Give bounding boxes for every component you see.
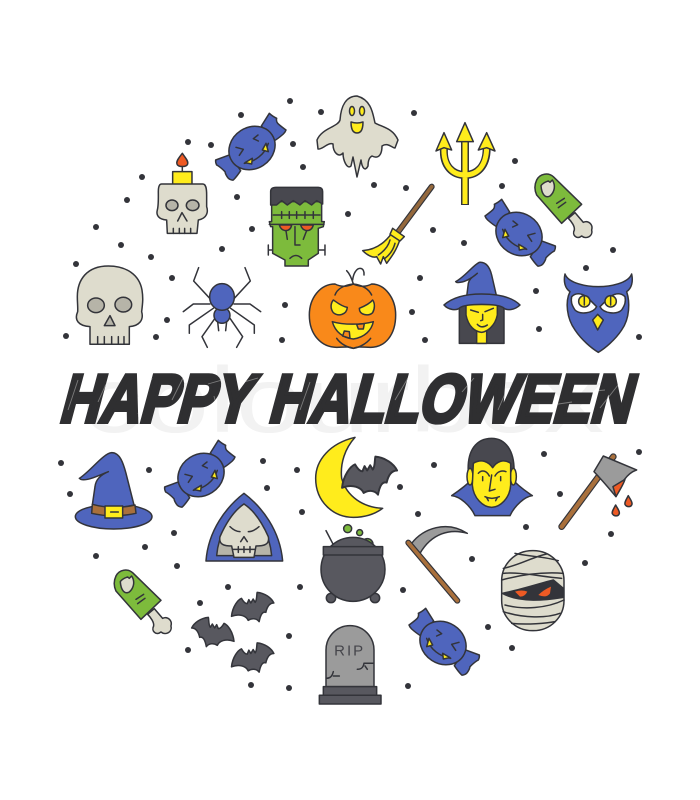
icon: hooded reaper bbox=[206, 493, 283, 561]
icon: tombstone bbox=[319, 626, 381, 704]
icon: witch bbox=[444, 262, 520, 343]
icon: scythe bbox=[408, 527, 467, 601]
watermark: colourbox bbox=[82, 348, 604, 452]
icon: zombie finger top bbox=[535, 174, 592, 238]
icon: candy bottom bbox=[409, 608, 479, 675]
title brush streaks bbox=[68, 376, 622, 414]
icon: candy top bbox=[216, 113, 286, 180]
icon: axe bbox=[562, 456, 637, 527]
icon: candy right bbox=[485, 199, 555, 266]
icon: vampire bbox=[452, 438, 532, 516]
icon: spider bbox=[183, 268, 261, 347]
icon: skull with candle bbox=[157, 153, 207, 233]
icon: zombie finger lower bbox=[114, 570, 171, 634]
decorative dots bbox=[58, 98, 642, 691]
icon: owl bbox=[564, 274, 632, 352]
icon: frankenstein bbox=[268, 187, 325, 266]
icon: trident bbox=[436, 123, 495, 205]
icon: cauldron bbox=[321, 525, 385, 603]
icon: candy left lower bbox=[165, 440, 235, 507]
icon: tombstone: RIP bbox=[334, 642, 365, 659]
icon: moon with bat bbox=[316, 437, 397, 517]
title bbox=[54, 360, 646, 437]
icon: ghost bbox=[317, 96, 398, 177]
icon: big skull bbox=[76, 266, 143, 344]
icon: broom bbox=[363, 187, 432, 264]
icon: three bats bbox=[192, 592, 274, 672]
icon: witch hat bbox=[75, 453, 152, 529]
icon: mummy bbox=[502, 551, 564, 631]
icon: pumpkin bbox=[309, 268, 396, 348]
title: HAPPY bbox=[54, 360, 266, 437]
